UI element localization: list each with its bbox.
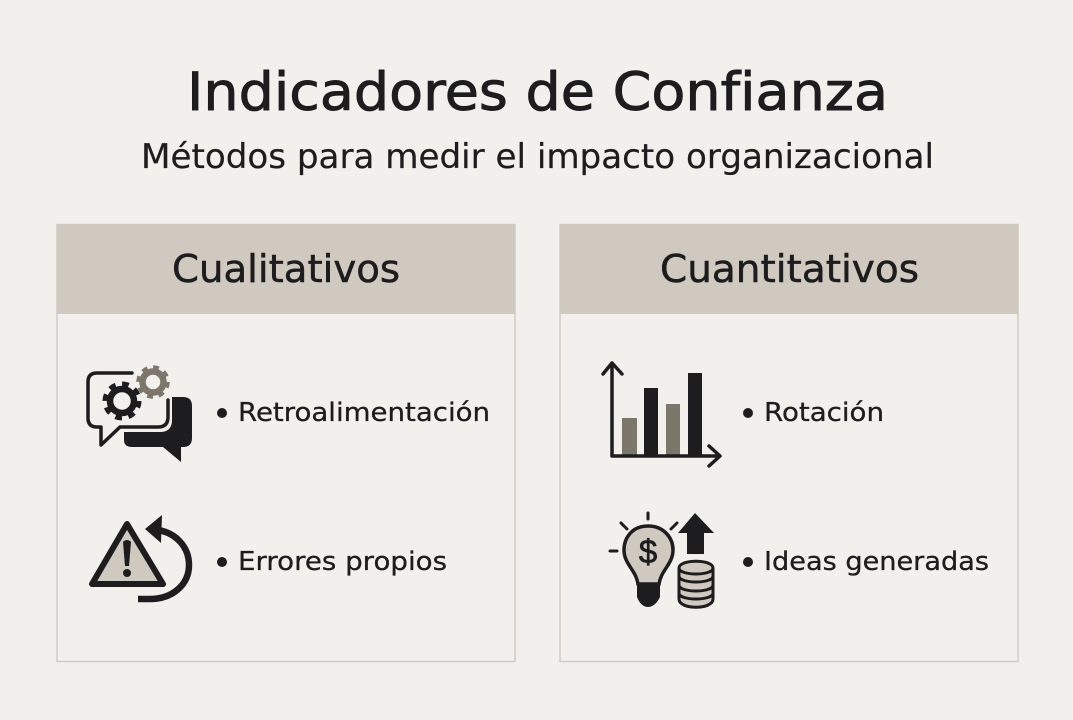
icon: speech bubbles with gears bbox=[88, 368, 192, 462]
bullet bbox=[217, 408, 227, 418]
item: Ideas generadas: Ideas generadas bbox=[764, 547, 989, 577]
bullet bbox=[217, 557, 227, 567]
icon: warning triangle with return arrow bbox=[92, 515, 189, 599]
panel: cuantitativos bbox=[560, 224, 1018, 662]
panel body bbox=[57, 224, 515, 662]
panel heading: Cuantitativos bbox=[660, 247, 919, 291]
icon: light bulb with coins and arrow: $ bbox=[639, 533, 657, 570]
panel heading: Cualitativos bbox=[172, 247, 400, 291]
icon: bar chart bbox=[603, 363, 720, 466]
item: Errores propios: Errores propios bbox=[238, 547, 447, 577]
bullet bbox=[743, 408, 753, 418]
icon: light bulb with coins and arrow bbox=[610, 513, 714, 607]
bullet bbox=[743, 557, 753, 567]
panel: cualitativos bbox=[57, 224, 515, 662]
item: Retroalimentación: Retroalimentación bbox=[238, 398, 490, 428]
item: Rotación: Rotación bbox=[764, 398, 884, 428]
title: Indicadores de Confianza bbox=[187, 62, 888, 123]
subtitle: Métodos para medir el impacto organizacional bbox=[141, 137, 934, 177]
panel header bbox=[560, 224, 1018, 314]
panel header bbox=[57, 224, 515, 314]
panel body bbox=[560, 224, 1018, 662]
